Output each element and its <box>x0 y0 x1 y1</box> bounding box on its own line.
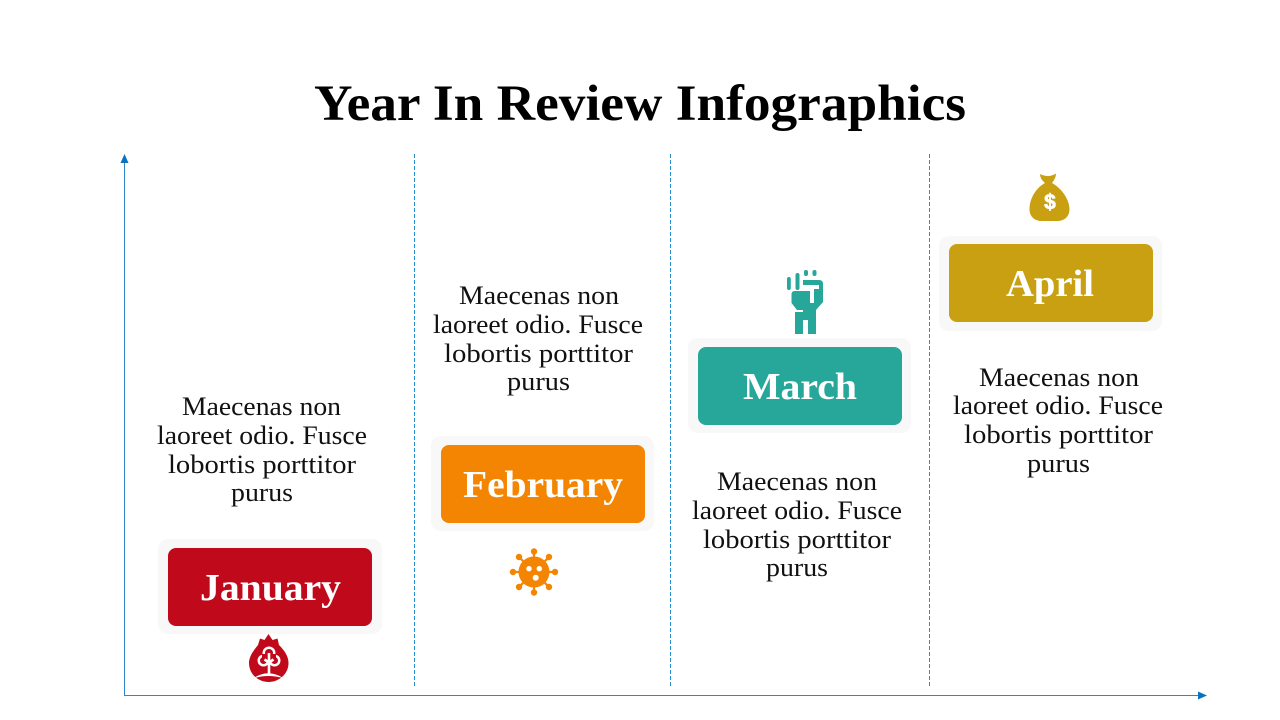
April description: Maecenas non <box>979 362 1139 392</box>
panel: January <box>157 391 382 682</box>
February description: laoreet odio. Fusce <box>433 309 643 339</box>
March description: lobortis porttitor <box>703 524 891 554</box>
April description: lobortis porttitor <box>964 419 1153 449</box>
January label <box>158 539 382 634</box>
icon: money bag: $ <box>1044 191 1056 214</box>
February description: purus <box>507 366 570 396</box>
panel: February <box>431 280 654 596</box>
icon: money bag <box>1030 174 1070 221</box>
icon: raised fist <box>787 270 823 334</box>
April label: April <box>1006 263 1094 305</box>
January description: lobortis porttitor <box>168 449 356 479</box>
January label: January <box>200 567 341 609</box>
March description <box>692 466 902 582</box>
January description: Maecenas non <box>182 391 341 421</box>
chart axes and dividers <box>120 154 1207 700</box>
February label: February <box>463 464 623 506</box>
panel: April <box>939 174 1163 478</box>
February description <box>433 280 643 396</box>
March label: March <box>743 366 857 408</box>
March description: laoreet odio. Fusce <box>692 495 902 525</box>
March description: purus <box>766 552 828 582</box>
February description: Maecenas non <box>459 280 619 310</box>
icon: tree in flame <box>249 634 288 682</box>
panel: March <box>688 270 911 582</box>
icon: virus <box>510 548 558 596</box>
January description: purus <box>231 477 293 507</box>
February description: lobortis porttitor <box>444 338 633 368</box>
April description: purus <box>1027 448 1090 478</box>
January description: laoreet odio. Fusce <box>157 420 367 450</box>
March description: Maecenas non <box>717 466 877 496</box>
March label <box>688 338 911 433</box>
January description <box>157 391 367 507</box>
February label <box>431 436 654 531</box>
April label <box>939 236 1162 331</box>
April description: laoreet odio. Fusce <box>953 390 1163 420</box>
title: Year In Review Infographics <box>314 76 966 132</box>
April description <box>953 362 1163 478</box>
